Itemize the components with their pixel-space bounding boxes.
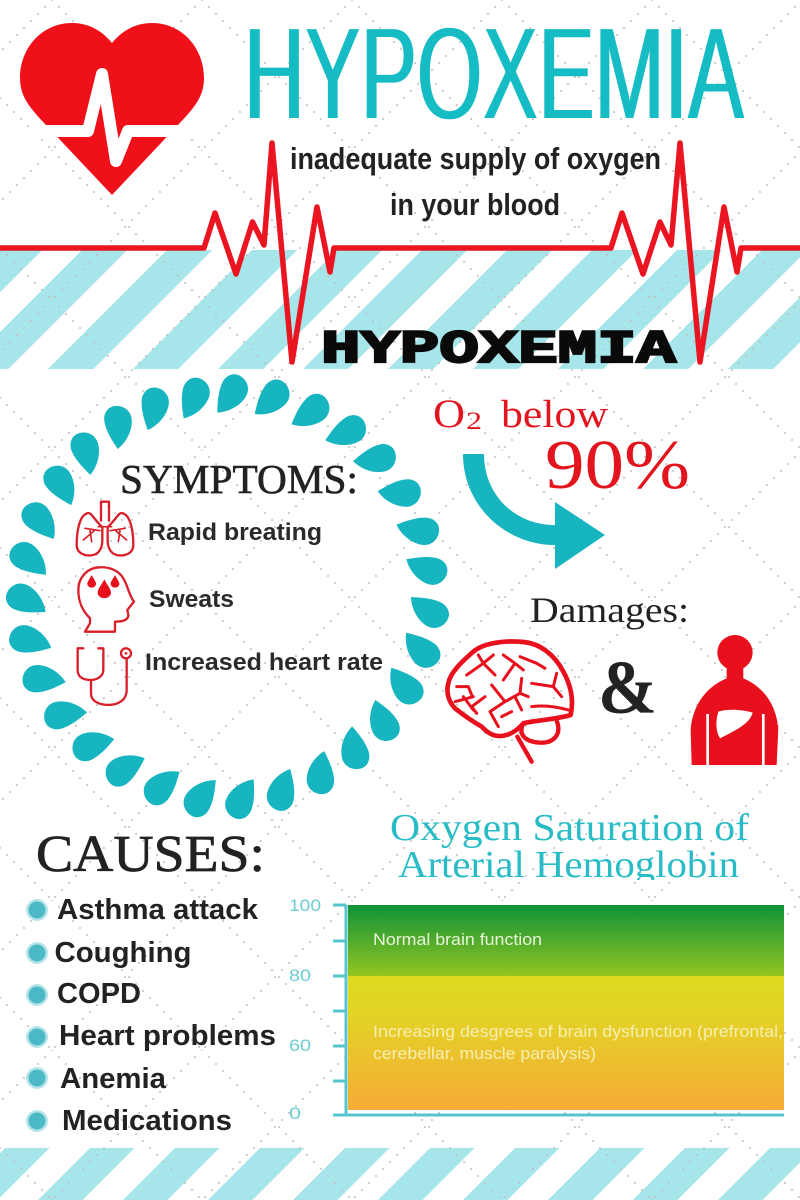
symptom: sweats: Sweats	[149, 586, 234, 613]
heartbeat line	[0, 143, 800, 362]
icon: person with liver	[691, 635, 778, 765]
cause: medications: Medications	[62, 1105, 232, 1137]
axis labels: 80	[289, 966, 311, 985]
icon: stethoscope	[78, 648, 131, 705]
icon: heart with pulse	[20, 23, 204, 195]
band label: normal: Normal brain function	[373, 930, 542, 949]
chart title: Arterial Hemoglobin	[398, 844, 739, 886]
subtitle	[290, 141, 661, 222]
band label: dysfunction	[373, 1022, 783, 1063]
cause: COPD: COPD	[57, 978, 141, 1010]
causes heading: CAUSES:	[36, 826, 265, 883]
arrow	[463, 454, 605, 569]
axis and ticks	[333, 905, 784, 1115]
damages heading: Damages:	[530, 590, 689, 630]
icon: brain	[447, 641, 572, 762]
O2 below label	[433, 391, 608, 436]
cause: asthma attack: Asthma attack	[57, 894, 259, 926]
symptom: increased heart rate: Increased heart rate	[145, 649, 383, 676]
top stripe band	[0, 250, 800, 369]
O2 below label: below	[501, 393, 608, 436]
band: dysfunction	[348, 976, 784, 1110]
secondary heading: HYPOXEMIA	[321, 324, 677, 376]
chart title	[392, 813, 749, 880]
90 percent figure: 90%	[545, 427, 690, 504]
chart title: Oxygen Saturation of	[390, 807, 749, 849]
axis labels	[289, 896, 321, 1123]
ring of teal drops	[2, 370, 454, 823]
subtitle: inadequate supply of oxygen	[290, 141, 661, 176]
O2 below label: O	[433, 391, 465, 436]
axis labels: 0	[289, 1104, 301, 1123]
subtitle: in your blood	[390, 187, 560, 222]
band label: dysfunction: cerebellar, muscle paralysis)	[373, 1044, 596, 1063]
bottom stripe band	[0, 1148, 800, 1200]
symptoms heading: SYMPTOMS:	[120, 456, 358, 502]
axis labels: 100	[289, 896, 321, 915]
band label: dysfunction: Increasing desgrees of brain dysfunction (prefrontal,	[373, 1022, 783, 1041]
icon: head with sweat drops	[78, 567, 134, 632]
O2 below label: 2	[466, 408, 482, 435]
chart: oxygen saturation bands	[289, 896, 784, 1123]
axis labels: 60	[289, 1036, 311, 1055]
causes list	[26, 894, 276, 1137]
ampersand: &	[598, 646, 657, 730]
icon: lungs	[77, 502, 133, 555]
band: normal	[348, 905, 784, 976]
cause: heart problems: Heart problems	[59, 1020, 276, 1052]
cause: coughing: Coughing	[54, 937, 192, 969]
symptom: rapid breathing: Rapid breating	[148, 519, 322, 546]
cause: anemia: Anemia	[60, 1063, 167, 1095]
